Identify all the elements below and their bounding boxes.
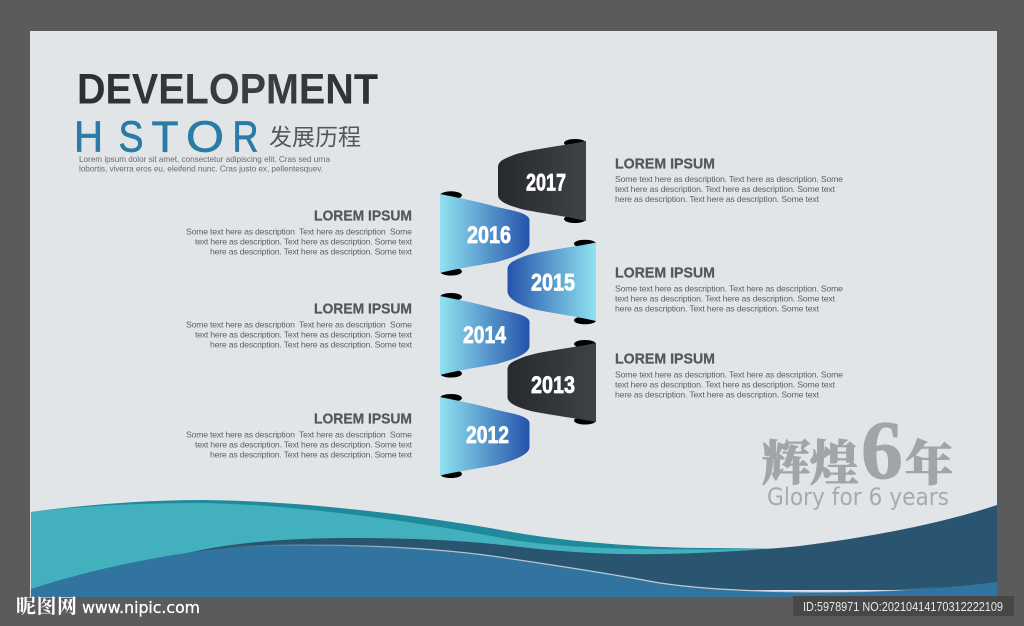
ribbon: 2014: 2014 [463, 322, 507, 349]
ribbon: 2014 [440, 293, 530, 378]
text block: 2015: text here as description. Text here as description. Some text [615, 294, 836, 304]
watermark: image id [793, 596, 1014, 616]
heading: DEVELOPMENT: DEVELOPMENT [77, 66, 378, 114]
ribbon: 2017: 2017 [526, 170, 566, 196]
ribbon: 2013 [508, 340, 596, 424]
watermark: site logo: 昵图网 [16, 590, 77, 619]
text block: 2016: Some text here as description Text here as description Some [186, 226, 412, 236]
text block: 2017: Some text here as description. Text here as description. Some [615, 174, 843, 184]
text block: 2016 [186, 208, 413, 256]
ribbon: 2012 [440, 394, 530, 478]
ribbon: 2016: 2016 [467, 222, 511, 249]
text block: 2017: text here as description. Text here as description. Some text [615, 184, 836, 194]
text block: 2017: here as description. Text here as description. Some text [615, 194, 820, 204]
heading: HSTOR: T [152, 112, 178, 162]
heading: chinese subtitle: 发展历程 [269, 118, 361, 152]
text block: 2013: Some text here as description. Text here as description. Some [615, 370, 843, 380]
text block: 2017: LOREM IPSUM [615, 156, 715, 172]
anniversary badge [762, 404, 953, 511]
text block: 2012 [186, 410, 413, 460]
text block: 2014: here as description. Text here as description. Some text [210, 340, 413, 350]
text block: 2015 [615, 264, 843, 314]
badge: numeral 6: 6 [861, 404, 903, 497]
wave: highlight line [215, 545, 940, 592]
text block: 2014: Some text here as description Text here as description Some [186, 320, 412, 330]
watermark: site logo: www.nipic.com [82, 598, 200, 617]
badge: chinese headline: 年 [905, 425, 953, 494]
intro text: Lorem ipsum dolor sit amet, consectetur adipiscing elit. Cras sed urna [79, 155, 330, 164]
wave: dark navy [192, 505, 997, 590]
text block: 2014 [186, 300, 413, 350]
bottom waves [31, 500, 997, 597]
heading: HSTOR: O [186, 112, 224, 162]
text block: 2013 [615, 350, 843, 400]
text block: 2012: LOREM IPSUM [314, 410, 412, 428]
wave: dark teal band [31, 500, 790, 560]
intro text [79, 155, 330, 174]
text block: 2016: LOREM IPSUM [314, 208, 412, 224]
text block: 2016: text here as description. Text here as description. Some text [195, 236, 413, 246]
badge: caption: Glory for 6 years [767, 483, 949, 511]
ribbon: 2015: 2015 [531, 270, 575, 296]
badge: chinese headline: 辉煌 [762, 425, 858, 494]
ribbon: 2012: 2012 [466, 422, 509, 449]
text block: 2014: text here as description. Text here as description. Some text [195, 330, 413, 340]
wave: light teal [31, 503, 760, 590]
text block: 2013: here as description. Text here as description. Some text [615, 390, 820, 400]
heading: HSTOR: H [74, 112, 103, 162]
text block: 2012: here as description. Text here as description. Some text [210, 450, 413, 460]
text block: 2015: LOREM IPSUM [615, 264, 715, 282]
text block: 2012: Some text here as description Text here as description Some [186, 430, 412, 440]
heading: HSTOR: R [232, 112, 258, 162]
intro text: lobortis, viverra eros eu, eleifend nunc. Cras justo ex, pellentesquev. [79, 164, 323, 174]
text block: 2015: here as description. Text here as description. Some text [615, 304, 820, 314]
ribbon: 2013: 2013 [531, 372, 575, 399]
ribbon: 2016 [440, 191, 530, 276]
text block: 2016: here as description. Text here as description. Some text [210, 246, 413, 256]
heading: HSTOR [74, 112, 258, 162]
heading: HSTOR: S [118, 112, 144, 162]
wave: blue foreground [31, 545, 997, 597]
ribbon: 2017 [498, 139, 586, 223]
text block: 2015: Some text here as description. Text here as description. Some [615, 284, 843, 294]
ribbon: 2015 [508, 240, 596, 324]
text block: 2014: LOREM IPSUM [314, 300, 412, 318]
text block: 2017 [615, 156, 843, 204]
text block: 2012: text here as description. Text here as description. Some text [195, 440, 413, 450]
title block [74, 66, 378, 174]
watermark: site logo [16, 590, 200, 619]
text block: 2013: text here as description. Text here as description. Some text [615, 380, 836, 390]
text block: 2013: LOREM IPSUM [615, 350, 715, 368]
